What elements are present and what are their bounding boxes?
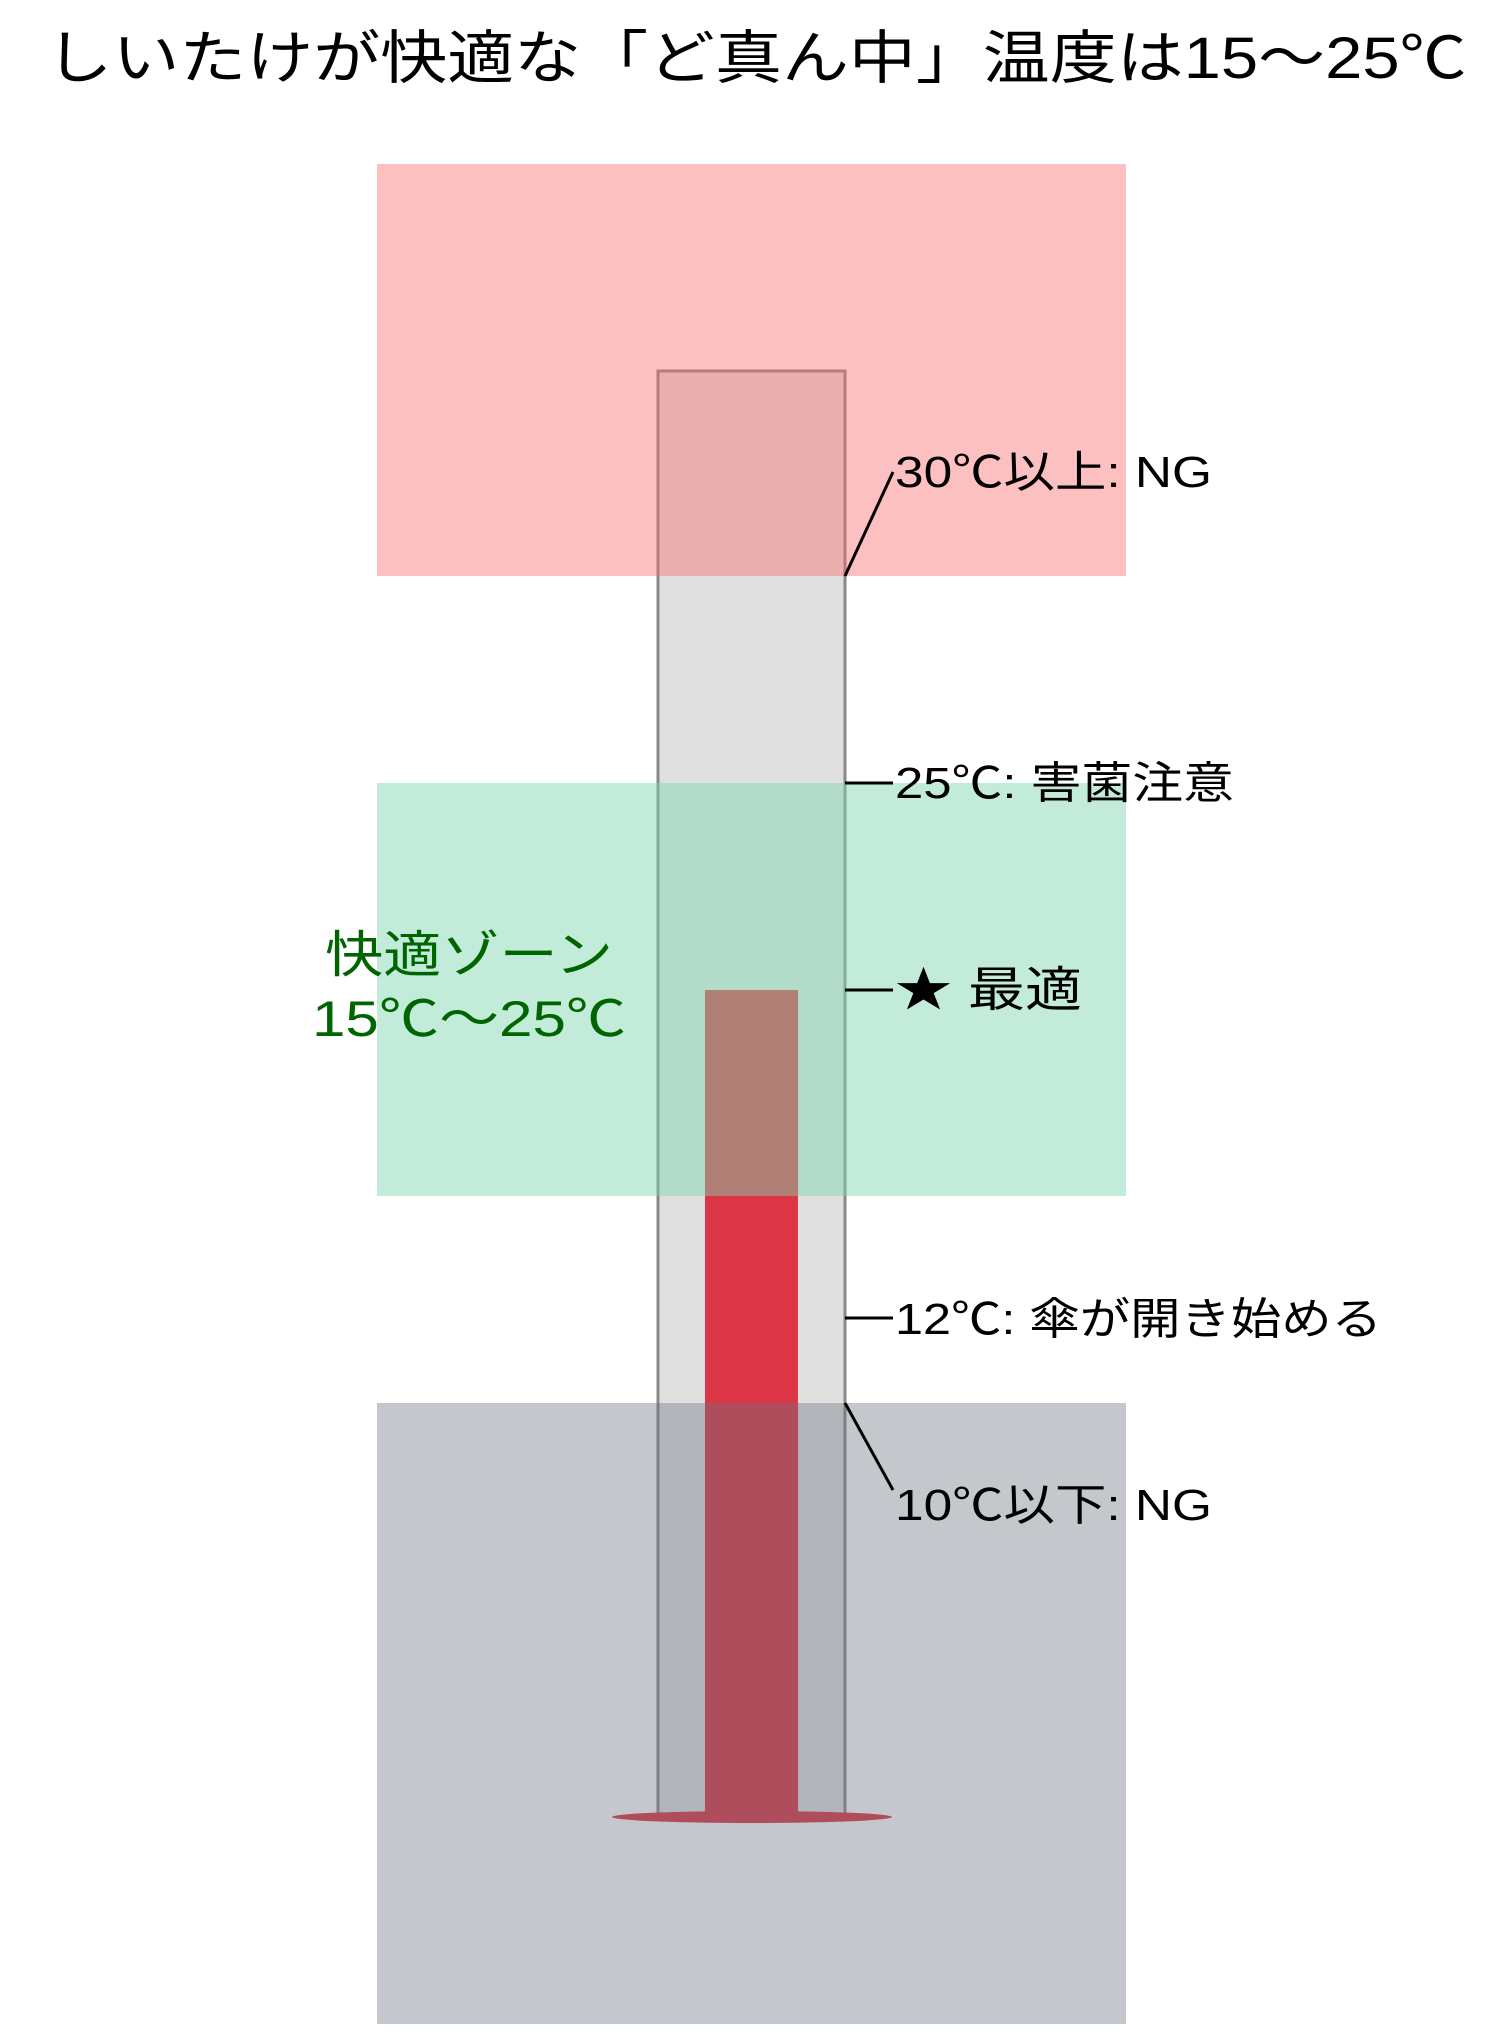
label: 30℃以上: 30℃以上: NG xyxy=(895,448,1212,497)
comfort zone label: 快適ゾーン xyxy=(325,927,613,983)
thermometer tube xyxy=(658,371,845,1816)
title: しいたけが快適な「ど真ん中」温度は15〜25℃ xyxy=(46,26,1466,91)
label: 10℃以下: 10℃以下: NG xyxy=(895,1481,1212,1530)
zone: cold NG xyxy=(377,1403,1126,2024)
comfort zone label: 15℃〜25℃ xyxy=(312,991,626,1047)
mercury bar xyxy=(612,990,892,1823)
label: 10℃以下 xyxy=(845,1403,1212,1530)
zone: hot NG xyxy=(377,164,1126,576)
label: 最適: ★ 最適 xyxy=(895,964,1082,1017)
comfort zone label xyxy=(312,927,626,1047)
label: 30℃以上 xyxy=(845,448,1212,576)
label: 12℃: 12℃: 傘が開き始める xyxy=(895,1295,1382,1344)
label: 25℃: 25℃: 害菌注意 xyxy=(895,759,1234,808)
zone: comfort xyxy=(377,783,1126,1196)
